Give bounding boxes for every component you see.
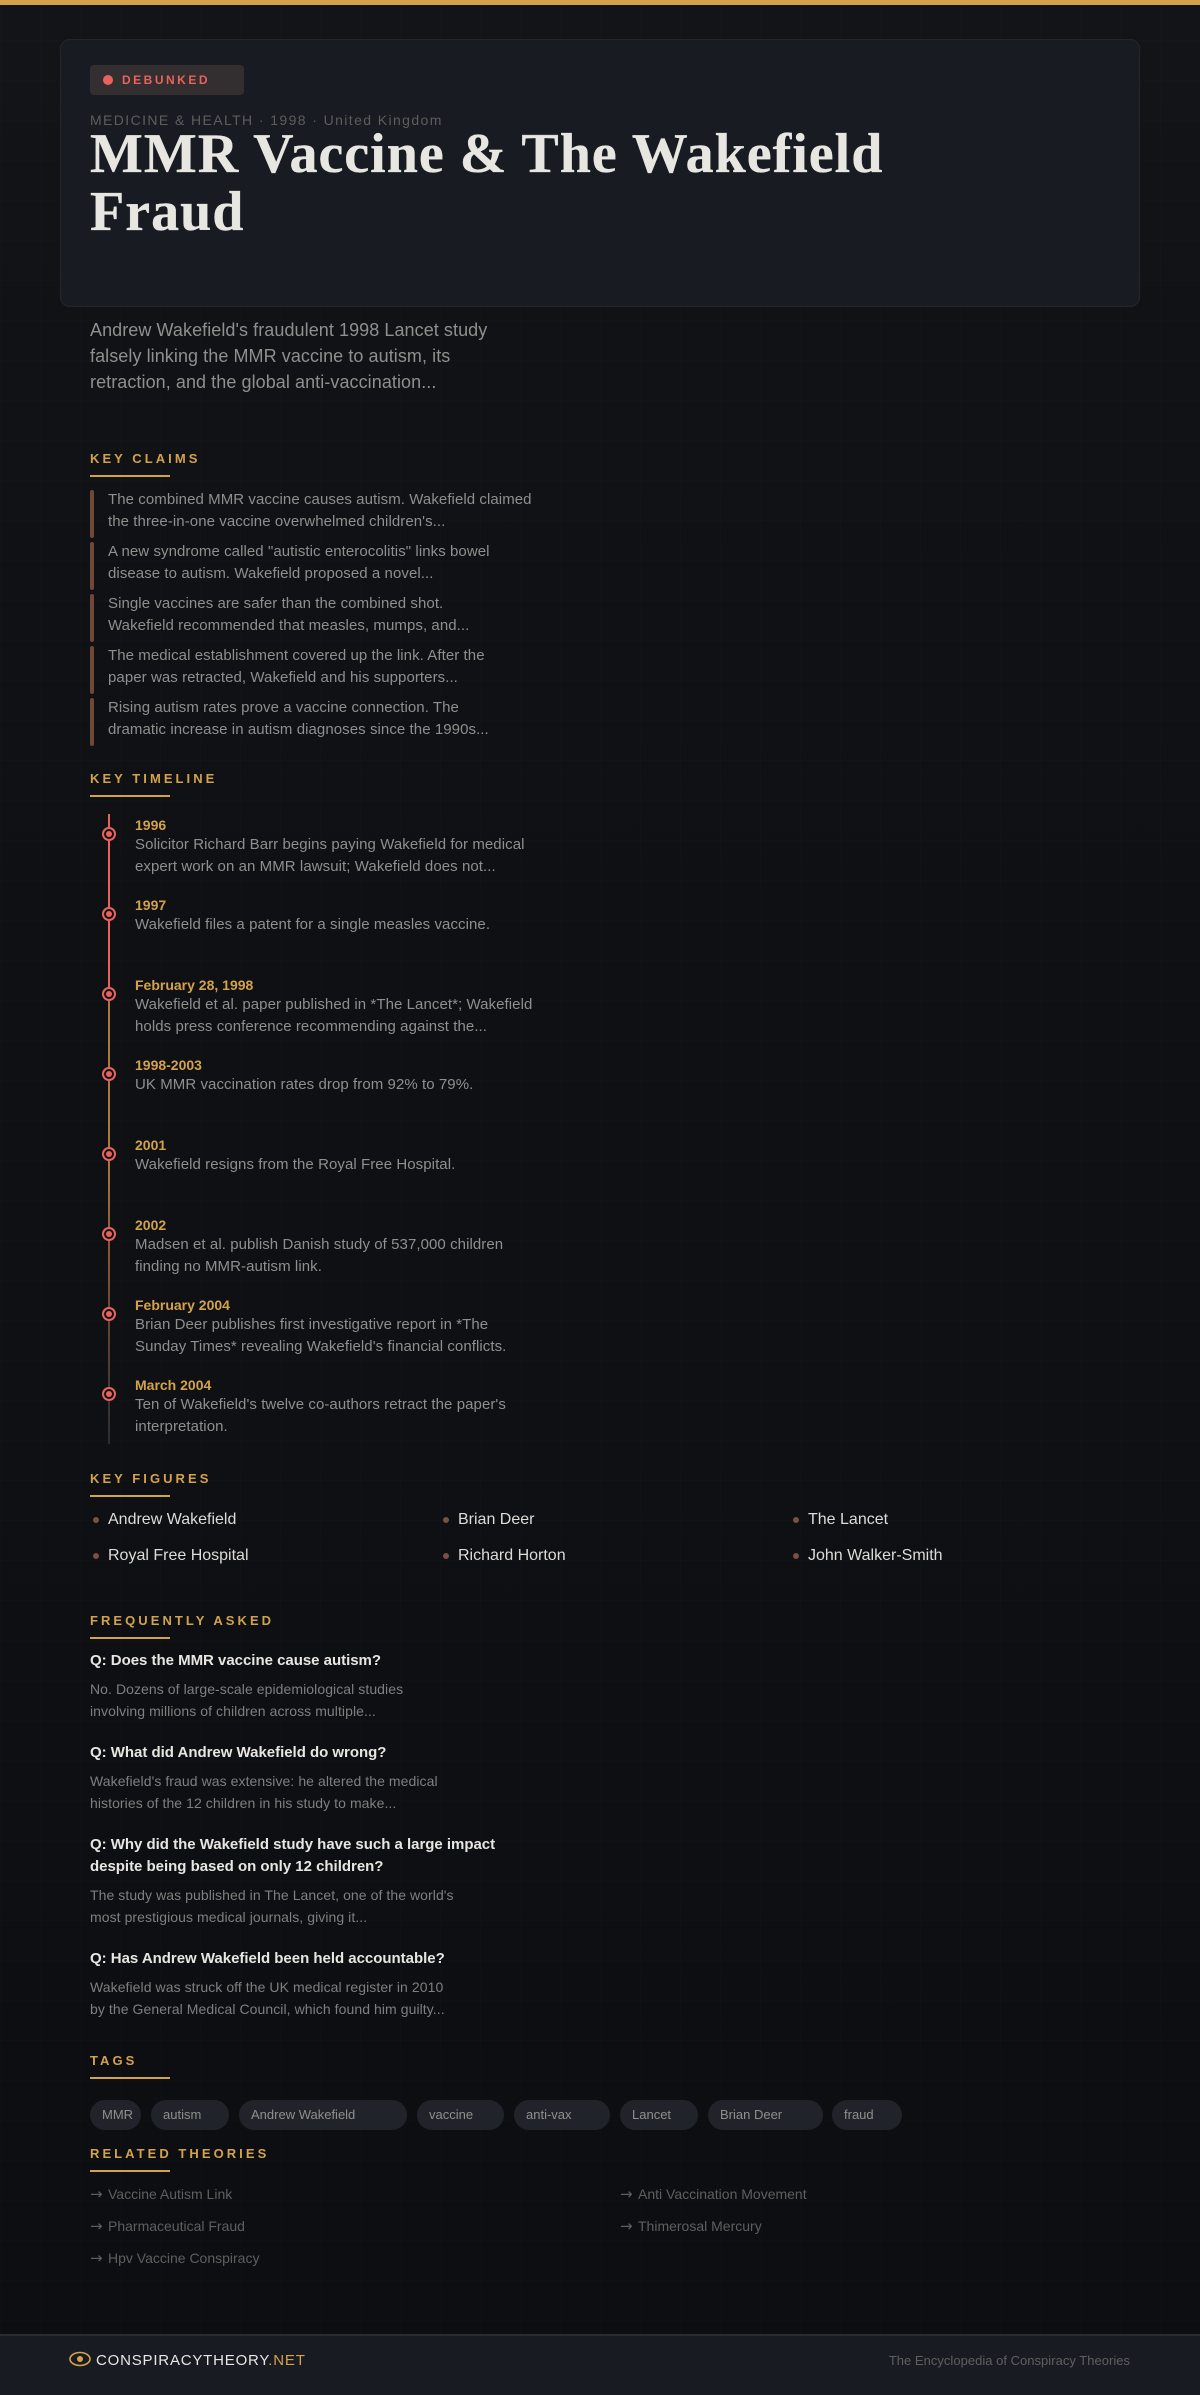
event: February 28, 1998: Wakefield et al. paper published in *The Lancet*; Wakefield <box>135 996 532 1013</box>
tag list <box>90 2100 902 2130</box>
claim 5 <box>90 698 489 746</box>
heading: related theories: RELATED THEORIES <box>90 2146 269 2161</box>
faq item 1: No. Dozens of large-scale epidemiological studies <box>90 1681 403 1697</box>
claim 1 <box>90 490 532 538</box>
related link: Hpv Vaccine Conspiracy <box>108 2250 259 2266</box>
tag <box>151 2100 229 2130</box>
event: 1997: Wakefield files a patent for a single measles vaccine. <box>135 916 490 933</box>
event: 2002: 2002 <box>135 1217 166 1233</box>
claim 4: paper was retracted, Wakefield and his supporters... <box>108 669 458 686</box>
tag <box>620 2100 698 2130</box>
faq item 2: Wakefield's fraud was extensive: he altered the medical <box>90 1773 438 1789</box>
event: 1998-2003 <box>102 1057 473 1093</box>
event: February 28, 1998 <box>102 977 532 1035</box>
tag: anti-vax <box>526 2107 572 2122</box>
event: 1996: Solicitor Richard Barr begins paying Wakefield for medical <box>135 836 525 853</box>
figure: Brian Deer: Brian Deer <box>458 1511 534 1528</box>
event: 2001: 2001 <box>135 1137 166 1153</box>
claim 2 <box>90 542 490 590</box>
top accent bar <box>0 0 1200 5</box>
faq item 2 <box>90 1744 438 1811</box>
event: February 28, 1998: February 28, 1998 <box>135 977 253 993</box>
claim 4: The medical establishment covered up the link. After the <box>108 647 485 664</box>
event: March 2004 <box>102 1377 506 1435</box>
timeline spine <box>108 814 110 1444</box>
claim 4 <box>90 646 485 694</box>
event: March 2004: interpretation. <box>135 1418 228 1435</box>
tag <box>90 2100 141 2130</box>
category and location line: MEDICINE & HEALTH · 1998 · United Kingdom <box>90 112 443 128</box>
faq item 3: despite being based on only 12 children? <box>90 1858 383 1875</box>
faq item 3: Q: Why did the Wakefield study have such a large impact <box>90 1836 495 1853</box>
event: 2001 <box>102 1137 455 1173</box>
event: February 2004: February 2004 <box>135 1297 230 1313</box>
claim 5: dramatic increase in autism diagnoses since the 1990s... <box>108 721 489 738</box>
heading: frequently asked: FREQUENTLY ASKED <box>90 1613 274 1628</box>
faq item 3: most prestigious medical journals, giving it... <box>90 1909 367 1925</box>
title <box>90 123 883 243</box>
figure: The Lancet: The Lancet <box>808 1511 888 1528</box>
event: 2002: finding no MMR-autism link. <box>135 1258 322 1275</box>
status badge: debunked <box>90 65 244 95</box>
faq item 3 <box>90 1836 495 1925</box>
claim 1: The combined MMR vaccine causes autism. Wakefield claimed <box>108 491 532 508</box>
tag: vaccine <box>429 2107 473 2122</box>
event: 1997: 1997 <box>135 897 166 913</box>
panel: key figures list <box>93 1511 943 1564</box>
related link: → <box>90 2185 103 2203</box>
icon: eye logo <box>69 2351 91 2367</box>
related link: → <box>90 2249 103 2267</box>
panel: hero header <box>60 39 1140 307</box>
faq item 1: Q: Does the MMR vaccine cause autism? <box>90 1652 381 1669</box>
icon: status dot <box>103 75 113 85</box>
summary text: Andrew Wakefield's fraudulent 1998 Lancet study <box>90 320 487 340</box>
faq item 1 <box>90 1652 403 1719</box>
related link: Anti Vaccination Movement <box>638 2186 807 2202</box>
heading: key claims: KEY CLAIMS <box>90 451 200 466</box>
summary text: falsely linking the MMR vaccine to autism, its <box>90 346 450 366</box>
related link: → <box>90 2217 103 2235</box>
event: 1998-2003: 1998-2003 <box>135 1057 202 1073</box>
faq item 2: Q: What did Andrew Wakefield do wrong? <box>90 1744 386 1761</box>
faq item 4: Q: Has Andrew Wakefield been held accountable? <box>90 1950 445 1967</box>
event: 1996: expert work on an MMR lawsuit; Wakefield does not... <box>135 858 496 875</box>
faq item 1: involving millions of children across multiple... <box>90 1703 376 1719</box>
event: March 2004: March 2004 <box>135 1377 211 1393</box>
tag: fraud <box>844 2107 874 2122</box>
footer <box>0 2334 1200 2395</box>
event: 1998-2003: UK MMR vaccination rates drop from 92% to 79%. <box>135 1076 473 1093</box>
related link: → <box>620 2217 633 2235</box>
tag: Brian Deer <box>720 2107 782 2122</box>
heading: key figures: KEY FIGURES <box>90 1471 211 1486</box>
panel: key claims list <box>90 490 532 746</box>
faq item 4: Wakefield was struck off the UK medical register in 2010 <box>90 1979 443 1995</box>
figure: Royal Free Hospital: Royal Free Hospital <box>108 1547 248 1564</box>
faq item 4 <box>90 1950 445 2017</box>
event: 2002: Madsen et al. publish Danish study of 537,000 children <box>135 1236 503 1253</box>
title: Fraud <box>90 181 244 243</box>
event: February 2004 <box>102 1297 506 1355</box>
event: 2001: Wakefield resigns from the Royal Free Hospital. <box>135 1156 455 1173</box>
summary text: retraction, and the global anti-vaccination... <box>90 372 436 392</box>
claim 2: A new syndrome called "autistic enterocolitis" links bowel <box>108 543 490 560</box>
tag <box>832 2100 902 2130</box>
figure: Richard Horton: Richard Horton <box>458 1547 566 1564</box>
claim 3: Single vaccines are safer than the combined shot. <box>108 595 443 612</box>
heading: tags: TAGS <box>90 2053 137 2068</box>
related link: Pharmaceutical Fraud <box>108 2218 245 2234</box>
event: 2002 <box>102 1217 503 1275</box>
heading: key timeline: KEY TIMELINE <box>90 771 217 786</box>
tag <box>239 2100 407 2130</box>
badge label: DEBUNKED <box>122 73 210 87</box>
faq item 3: The study was published in The Lancet, one of the world's <box>90 1887 454 1903</box>
tag: MMR <box>102 2107 133 2122</box>
event: February 28, 1998: holds press conference recommending against the... <box>135 1018 487 1035</box>
claim 2: disease to autism. Wakefield proposed a novel... <box>108 565 433 582</box>
event: 1996: 1996 <box>135 817 166 833</box>
related link: Vaccine Autism Link <box>108 2186 232 2202</box>
event: February 2004: Sunday Times* revealing Wakefield's financial conflicts. <box>135 1338 506 1355</box>
tag: Lancet <box>632 2107 671 2122</box>
logo wordmark: CONSPIRACYTHEORY.NET <box>96 2352 306 2369</box>
figure: John Walker-Smith: John Walker-Smith <box>808 1547 943 1564</box>
title: MMR Vaccine & The Wakefield <box>90 123 883 185</box>
related theories list <box>90 2185 807 2267</box>
event: 1997 <box>102 897 490 933</box>
claim 3 <box>90 594 469 642</box>
event: 1996 <box>102 817 525 875</box>
tag: autism <box>163 2107 201 2122</box>
related link: → <box>620 2185 633 2203</box>
claim 5: Rising autism rates prove a vaccine connection. The <box>108 699 459 716</box>
tag <box>514 2100 610 2130</box>
footer tagline: The Encyclopedia of Conspiracy Theories <box>889 2353 1130 2368</box>
figure: Andrew Wakefield: Andrew Wakefield <box>108 1511 236 1528</box>
summary text <box>90 320 488 392</box>
chart: key timeline <box>102 814 532 1444</box>
tag <box>708 2100 823 2130</box>
related link: Thimerosal Mercury <box>638 2218 762 2234</box>
claim 1: the three-in-one vaccine overwhelmed children's... <box>108 513 445 530</box>
event: March 2004: Ten of Wakefield's twelve co-authors retract the paper's <box>135 1396 506 1413</box>
claim 3: Wakefield recommended that measles, mumps, and... <box>108 617 469 634</box>
faq item 4: by the General Medical Council, which found him guilty... <box>90 2001 445 2017</box>
tag: Andrew Wakefield <box>251 2107 355 2122</box>
faq item 2: histories of the 12 children in his study to make... <box>90 1795 396 1811</box>
event: February 2004: Brian Deer publishes first investigative report in *The <box>135 1316 488 1333</box>
tag <box>417 2100 504 2130</box>
